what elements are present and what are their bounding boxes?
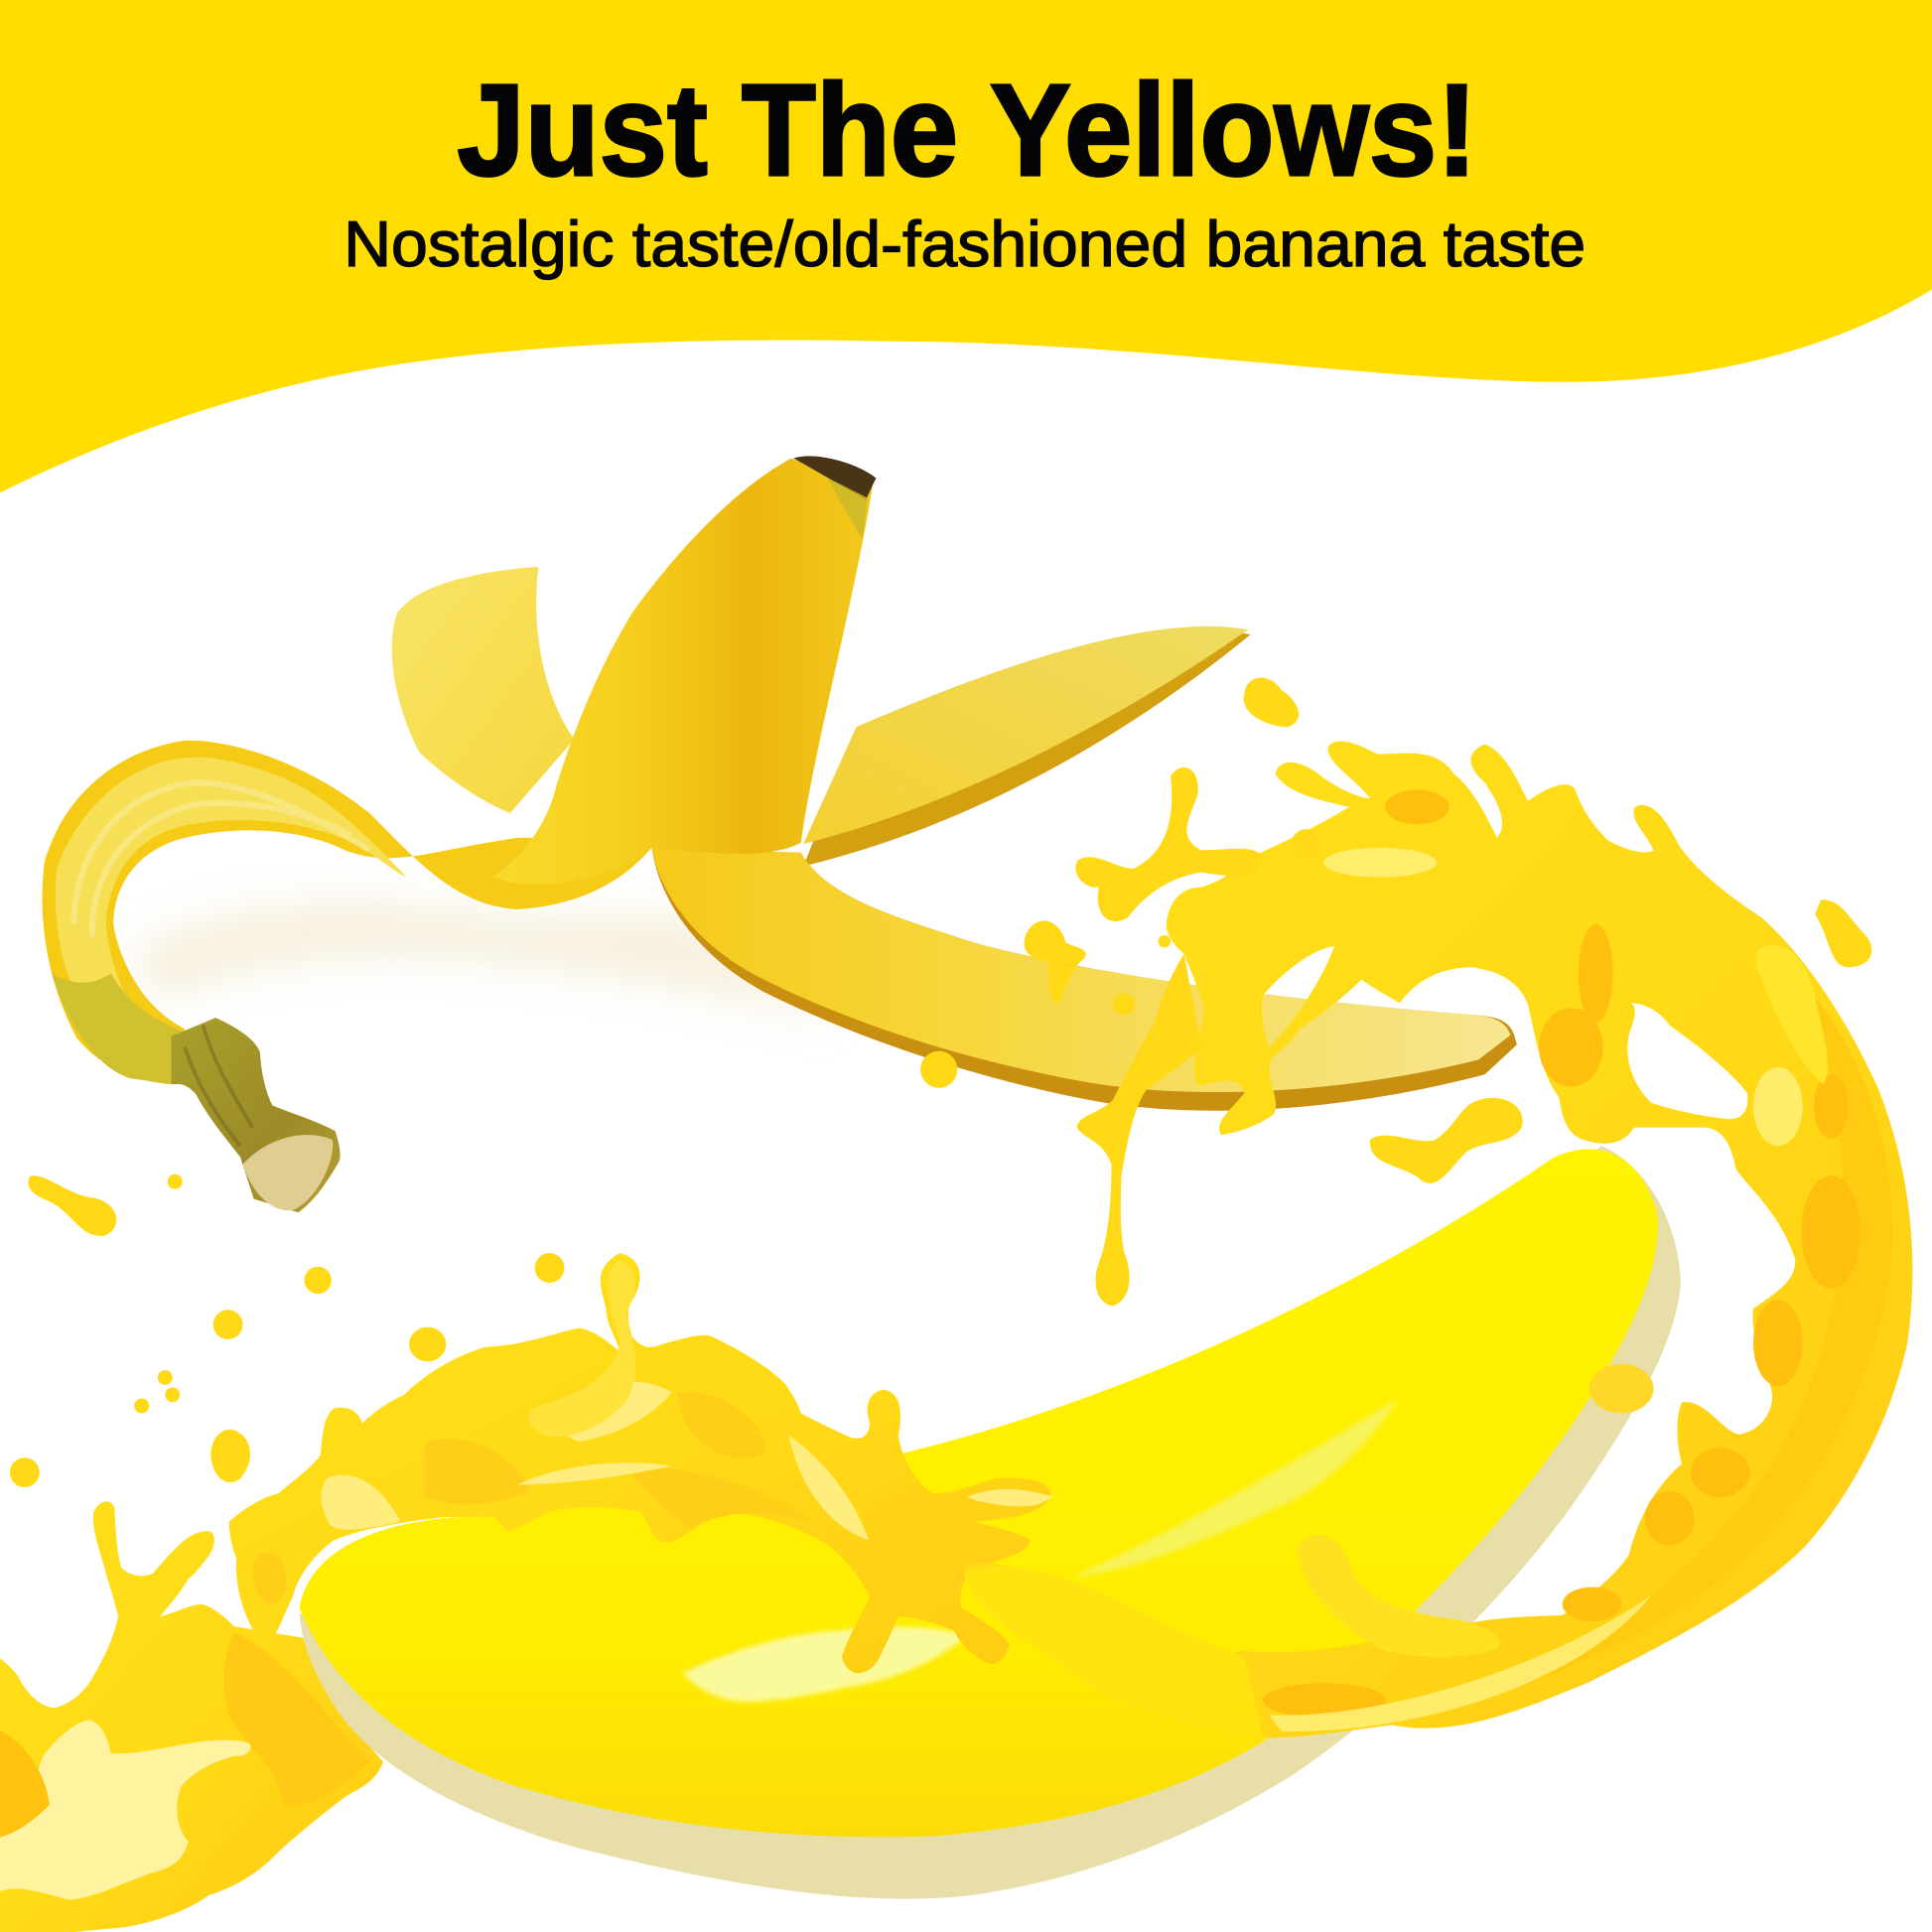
droplet — [1159, 935, 1171, 947]
illustration: peeled banana — [300, 1146, 1681, 1899]
banana cream underside — [300, 1146, 1681, 1899]
peel central body — [492, 459, 873, 885]
swirl amber pools — [1263, 790, 1861, 1718]
low tail — [1299, 1535, 1499, 1657]
title: Just The Yellows! — [457, 57, 1477, 203]
banana lower highlight — [683, 1626, 967, 1702]
banana highlight — [1072, 1399, 1399, 1578]
swirl light highlights — [1269, 848, 1803, 1731]
juice splash: vertical drip — [1077, 954, 1201, 1307]
flap pale inside — [56, 758, 407, 1023]
droplet branch — [1370, 1098, 1523, 1183]
flap green base — [52, 973, 185, 1084]
droplet — [28, 1175, 116, 1236]
lower bridge band — [964, 1567, 1263, 1737]
lower left amber edge — [0, 1729, 50, 1837]
peel back-left flap — [392, 567, 574, 813]
swirl upper arm — [1755, 945, 1828, 1084]
peel tip — [793, 456, 876, 499]
lower left amber area — [224, 1632, 369, 1806]
peel lower-right flap — [652, 848, 1517, 1111]
droplet — [1815, 899, 1871, 967]
flap fibre lines — [73, 782, 369, 936]
splash amber pools — [252, 1392, 813, 1603]
droplet — [1244, 678, 1299, 727]
peel green neck — [828, 479, 868, 540]
round drop on banana — [1589, 1364, 1654, 1414]
lower left pale pool — [0, 1720, 250, 1900]
droplet — [920, 1051, 957, 1088]
stem fibres — [185, 1026, 252, 1146]
subtitle: Nostalgic taste/old-fashioned banana taste — [344, 208, 1586, 280]
illustration: banana peel — [43, 456, 1517, 1212]
droplet — [1292, 829, 1320, 859]
header wave band — [0, 0, 1932, 492]
stem cut end — [242, 1135, 333, 1210]
banana yellow skin — [300, 1150, 1658, 1837]
splash drop stem — [528, 1259, 635, 1437]
juice splash: right swirl — [964, 742, 1912, 1737]
peel left curled flap — [43, 741, 659, 1084]
droplet — [1113, 993, 1135, 1016]
peel back-right flap — [803, 626, 1251, 866]
droplet branch — [1075, 767, 1263, 921]
juice splash: centre over banana — [229, 1253, 1053, 1673]
peel shadow — [136, 902, 838, 1023]
juice droplets: left scatter — [10, 1174, 564, 1487]
swirl deep amber band — [1516, 986, 1892, 1688]
splash light highlights — [322, 1381, 1053, 1540]
droplet — [1025, 920, 1086, 1004]
peel stem left — [172, 1018, 341, 1212]
juice splash: upper droplets — [920, 678, 1871, 1414]
juice splash: lower left — [0, 1501, 383, 1932]
